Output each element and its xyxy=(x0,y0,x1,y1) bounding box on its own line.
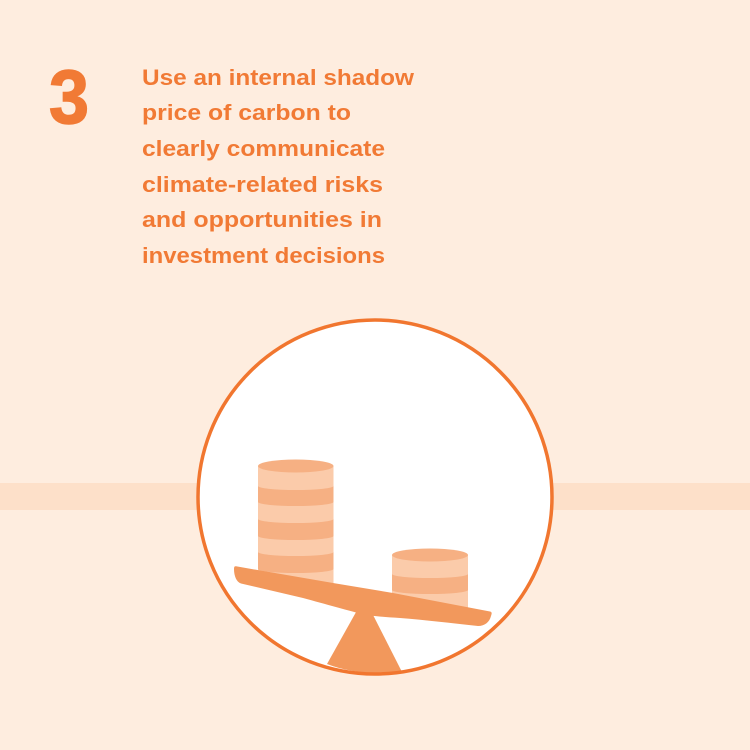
heading text block: and opportunities in xyxy=(142,207,382,232)
scale fulcrum xyxy=(327,605,402,673)
icon: short coin stack xyxy=(392,548,468,610)
circle outline xyxy=(198,320,552,674)
heading text block: price of carbon to xyxy=(142,100,351,125)
heading text block: clearly communicate xyxy=(142,136,385,161)
step number: 3 xyxy=(49,55,89,140)
heading text block: Use an internal shadow xyxy=(142,65,415,90)
horizontal band behind circle xyxy=(0,483,750,510)
circle panel fill xyxy=(198,320,552,674)
scale beam xyxy=(234,566,492,626)
heading text block: climate-related risks xyxy=(142,172,383,197)
heading text block: investment decisions xyxy=(142,243,385,268)
icon: tall coin stack xyxy=(258,460,334,590)
icon: tilted balance scale xyxy=(234,566,492,673)
heading text block xyxy=(142,65,415,268)
